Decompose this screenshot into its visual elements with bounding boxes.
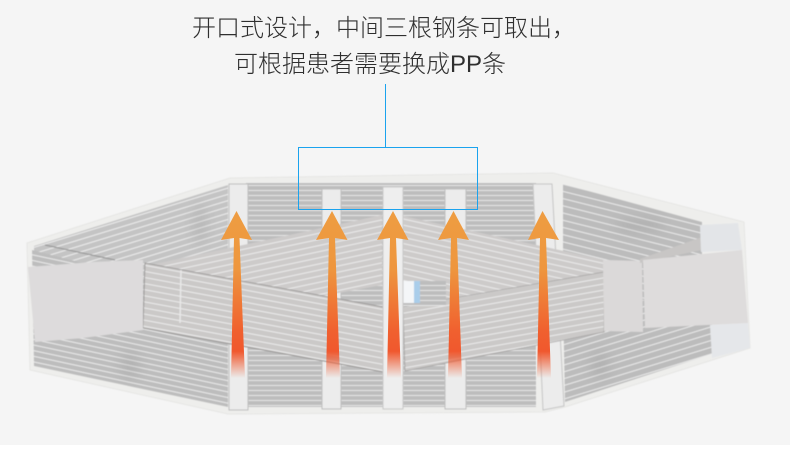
heading: 可根据患者需要换成PP条 [234,51,506,78]
lower strap left [143,263,383,372]
right upper white patch [700,223,742,252]
right velcro tab [603,260,643,332]
arrow 3 [377,211,408,378]
blue callout bracket [298,84,478,210]
heading: 开口式设计，中间三根钢条可取出， [192,15,576,42]
right lower mesh panel [563,300,712,402]
centre mesh panel [246,183,536,407]
white steel strip 5 [533,184,564,410]
lower strap right [403,272,604,371]
belt outline [27,173,750,414]
heading [192,15,576,78]
white steel strip 4 [445,189,466,409]
right velcro pad [643,250,748,328]
right upper mesh panel [563,184,702,300]
waist belt photo [27,173,750,414]
arrow 1 [221,211,252,378]
small tag [403,281,420,303]
centre white steel strip [383,187,403,409]
upper strap right [403,216,605,320]
white steel strip 2 [322,189,341,409]
white steel strip 1 [229,184,248,410]
arrow 2 [316,211,348,378]
fabric shading [120,205,664,379]
centre opening [402,281,446,306]
arrow 5 [528,211,559,378]
right lower white patch [710,323,750,358]
left lower mesh panel [32,250,228,407]
left velcro pad [28,260,143,342]
left crease [45,245,115,260]
arrow 4 [438,211,469,378]
strap seam [180,270,181,323]
upper strap left [155,215,382,300]
left upper mesh panel [34,185,228,300]
thin strap behind right velcro [640,237,702,263]
